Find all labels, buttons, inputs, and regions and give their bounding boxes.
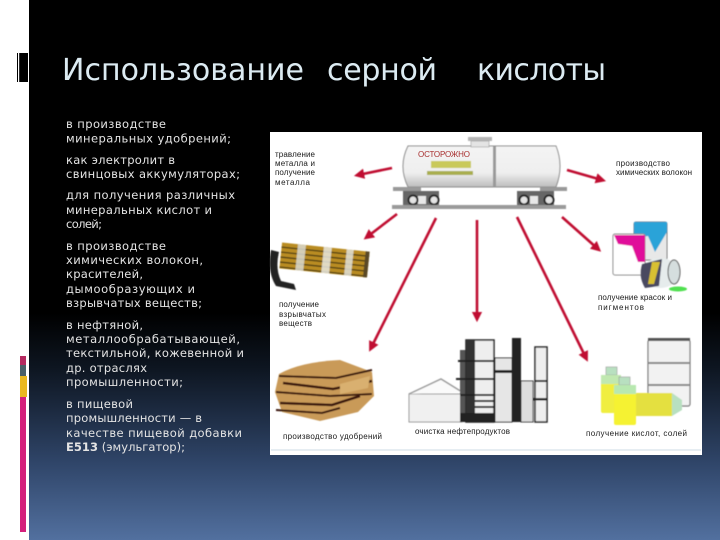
- text block: list of uses: минеральных кислот и: [66, 203, 212, 217]
- text block: list of uses: дымообразующих и: [66, 282, 195, 296]
- label: chemical fibers: производство: [616, 159, 671, 168]
- text block: list of uses: для получения различных: [66, 188, 235, 202]
- text block: list of uses: Е513 (эмульгатор);: [66, 440, 185, 454]
- label: explosives: получение: [279, 300, 320, 309]
- text block: list of uses: минеральных удобрений;: [66, 132, 231, 146]
- text block: list of uses: солей;: [66, 217, 102, 231]
- text block: list of uses: химических волокон,: [66, 253, 203, 267]
- text block: list of uses: в нефтяной,: [66, 318, 143, 332]
- text block: list of uses: текстильной, кожевенной и: [66, 346, 244, 360]
- label: explosives: веществ: [279, 319, 312, 328]
- text block: list of uses: свинцовых аккумуляторах;: [66, 167, 240, 181]
- label: explosives: [279, 300, 326, 328]
- label: metal etching: травление: [275, 150, 316, 159]
- top left marker: [17, 53, 28, 82]
- text block: list of uses: взрывчатых веществ;: [66, 296, 202, 310]
- label: metal etching: металла и: [275, 159, 315, 168]
- title: кислоты: [477, 53, 606, 88]
- icon: railway tank car: [392, 137, 567, 209]
- tank car label: ОСТОРОЖНО: [418, 150, 470, 159]
- text block: list of uses: др. отраслях: [66, 361, 147, 375]
- icon: explosive sticks: [270, 242, 370, 290]
- label: metal etching: [275, 150, 316, 187]
- title: [62, 53, 606, 88]
- label: chemical fibers: [616, 159, 692, 177]
- text block: list of uses: качестве пищевой добавки: [66, 426, 242, 440]
- label: acids and salts: получение кислот, солей: [586, 429, 687, 438]
- label: oil product cleaning: очистка нефтепродуктов: [415, 427, 510, 436]
- text block: list of uses: в производстве: [66, 239, 166, 253]
- text block: list of uses: в пищевой: [66, 397, 133, 411]
- text block: list of uses: в производстве: [66, 117, 166, 131]
- label: metal etching: получение: [275, 168, 316, 177]
- text block: list of uses: как электролит в: [66, 153, 175, 167]
- label: paints and pigments: [598, 293, 672, 312]
- icon: paint cans: [613, 222, 687, 292]
- bottom left colour bar: [20, 356, 27, 532]
- text block: list of uses: промышленности;: [66, 375, 183, 389]
- label: paints and pigments: пигментов: [598, 303, 644, 312]
- title: Использование: [62, 53, 304, 88]
- label: explosives: взрывчатых: [279, 310, 326, 319]
- text block: list of uses: металлообрабатывающей,: [66, 332, 240, 346]
- icon: oil refinery: [409, 338, 547, 422]
- text block: list of uses: [66, 117, 244, 454]
- arrows: [358, 168, 602, 358]
- text block: list of uses: промышленности — в: [66, 411, 202, 425]
- label: metal etching: металла: [275, 178, 311, 187]
- label: chemical fibers: химических волокон: [616, 168, 692, 177]
- icon: fertilizer sacks: [275, 360, 374, 421]
- label: fertilizer production: производство удобрений: [283, 432, 382, 441]
- panel: sulfuric acid uses diagram: [270, 132, 702, 455]
- label: paints and pigments: получение красок и: [598, 293, 672, 302]
- text block: list of uses: красителей,: [66, 267, 143, 281]
- icon: bottles and drum: [601, 338, 690, 425]
- title: серной: [327, 53, 437, 88]
